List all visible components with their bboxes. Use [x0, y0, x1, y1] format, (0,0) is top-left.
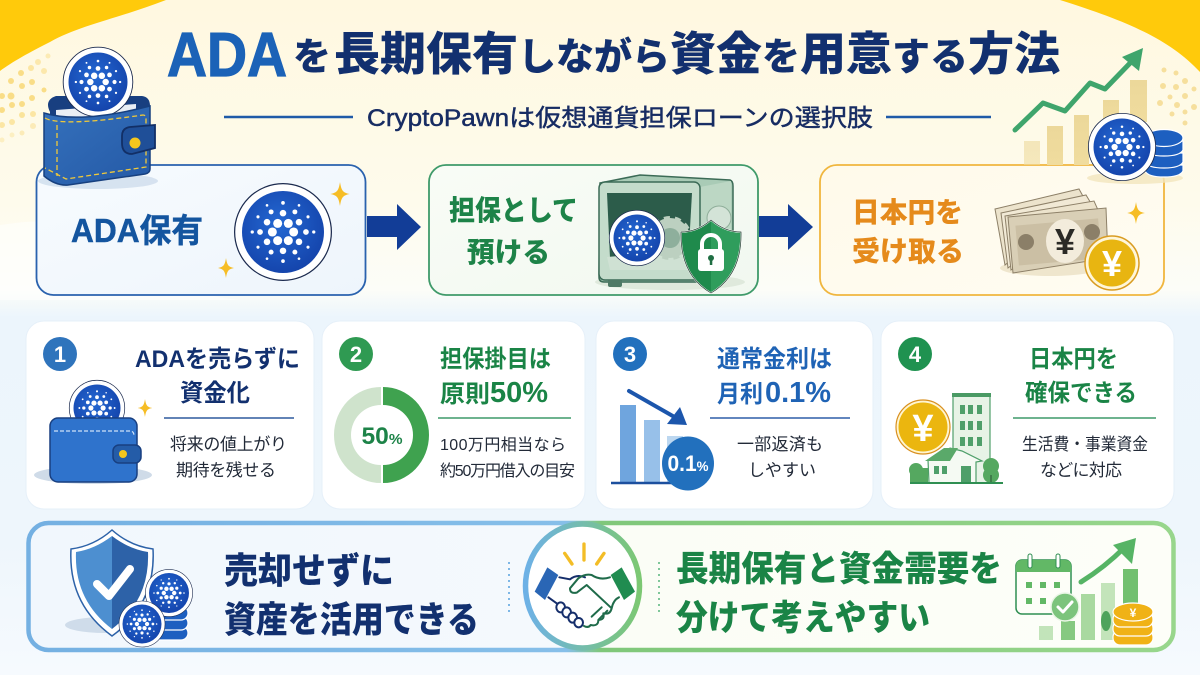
icon: safe: [595, 175, 745, 290]
title: を: [293, 37, 331, 79]
label: 担保として預ける: 担保として: [449, 195, 578, 226]
label: 日本円を受け取る: 日本円を: [852, 197, 963, 228]
decorative yellow corner top-left: [0, 0, 166, 71]
icon: blue shield with coins: [65, 530, 193, 647]
icon: banknotes: [995, 189, 1108, 276]
icon: wallet with coin: [38, 47, 158, 189]
icon: ADA coin: [235, 184, 331, 280]
heading: 確保できる: [1025, 380, 1137, 407]
ADA coin: [1088, 113, 1156, 181]
icon: building, house and yen coin: ¥: [912, 408, 934, 450]
heading: 日本円を: [1029, 346, 1118, 373]
number badge 4: [898, 337, 932, 371]
donut chart 50%: [334, 387, 429, 483]
donut chart 50%: 50%: [362, 423, 402, 450]
number badge 3: [613, 337, 647, 371]
icon: green shield with lock: [681, 220, 741, 293]
number badge 2: 2: [350, 342, 362, 367]
icon: growth chart with coins: [1015, 48, 1183, 184]
decorative halftone dots left: [0, 54, 50, 142]
card 4: [881, 321, 1174, 509]
right hand: [570, 575, 619, 627]
right message: 分けて考えやすい: [676, 599, 930, 638]
description: 生活費・事業資金: [1022, 435, 1148, 454]
label: 担保として預ける: 預ける: [467, 237, 550, 268]
icon: calendar and growth: [1016, 538, 1153, 645]
growth arrow: [1015, 58, 1135, 130]
number badge 3: 3: [624, 342, 636, 367]
description: 将来の値上がり: [170, 435, 287, 454]
icon: handshake circle: [526, 524, 640, 648]
icon: sparkle: [1127, 202, 1145, 224]
heading: 0.1%: [765, 377, 831, 409]
title: ADA: [167, 21, 287, 90]
label: 日本円を受け取る: 受け取る: [852, 236, 964, 267]
description: 期待を残せる: [176, 461, 276, 480]
yen coins: [1113, 603, 1153, 645]
bars: [1039, 569, 1138, 640]
right message: 長期保有と資金需要を: [676, 550, 1002, 589]
number badge 1: 1: [54, 342, 66, 367]
icon: building, house and yen coin: [896, 393, 1003, 483]
calendar: [1016, 560, 1071, 614]
icon: small sparkle: [218, 258, 234, 278]
panel: deposit as collateral: [429, 165, 758, 295]
icon: falling bars: 0.1%: [668, 451, 709, 476]
card 2: [322, 321, 585, 509]
decorative yellow corner top-right: [1060, 0, 1200, 72]
panel: receive yen: [820, 165, 1164, 295]
yen coin: [896, 400, 950, 454]
coin stack: [150, 606, 188, 640]
rays: [565, 544, 604, 564]
subtitle: CryptoPawnは仮想通貨担保ローンの選択肢: [367, 105, 873, 132]
icon: sparkle: [138, 399, 152, 417]
decorative pale wave: [0, 221, 240, 300]
heading: 担保掛目は: [440, 346, 551, 373]
panel: ADA holding: [36, 165, 366, 295]
icon: wallet: [34, 380, 152, 484]
number badge 4: 4: [909, 342, 922, 367]
number badge 2: [339, 337, 373, 371]
left message: 資産を活用できる: [224, 599, 479, 640]
chart bars: [1024, 80, 1147, 165]
icon: calendar and growth: ¥: [1130, 606, 1137, 620]
title: 長期保有しながら資金を用意する方法: [334, 28, 1060, 80]
icon: banknotes: ¥: [1055, 221, 1075, 262]
left hand: [548, 576, 585, 603]
description: 約50万円借入の目安: [440, 462, 575, 480]
icon: sparkle: [330, 182, 350, 206]
icon: falling bars: [611, 391, 714, 490]
description: などに対応: [1040, 461, 1122, 480]
heading: 月利: [717, 381, 763, 408]
heading: 資金化: [180, 380, 250, 407]
heading: ADAを売らずに: [135, 346, 300, 373]
card 1: [26, 321, 314, 509]
heading: 50%: [490, 377, 548, 409]
coin stack: [1145, 130, 1183, 177]
decorative halftone dots right: [1157, 68, 1197, 126]
arrow: [1081, 547, 1125, 582]
heading: 原則: [440, 381, 490, 408]
icon: yen coin: ¥: [1102, 243, 1122, 284]
bottom banner: [28, 523, 1174, 650]
coin in wallet: [63, 47, 133, 117]
label: ADA保有: ADA保有: [71, 212, 203, 249]
0.1% circle: [662, 436, 714, 490]
icon: yen coin: [1085, 236, 1139, 290]
leaf: [1101, 611, 1111, 631]
description: 一部返済も: [737, 435, 823, 454]
description: 100万円相当なら: [440, 436, 566, 454]
number badge 1: [43, 337, 77, 371]
arrow: ADA to collateral: [367, 204, 421, 250]
left message: 売却せずに: [224, 550, 394, 591]
card 3: [596, 321, 873, 509]
check badge: [1051, 593, 1079, 621]
heading: 通常金利は: [717, 346, 832, 373]
arrow: collateral to yen: [759, 204, 813, 250]
description: しやすい: [748, 461, 816, 480]
icon: ADA coin in safe: [609, 210, 665, 266]
right cuff: [611, 567, 635, 600]
left cuff: [535, 567, 558, 600]
